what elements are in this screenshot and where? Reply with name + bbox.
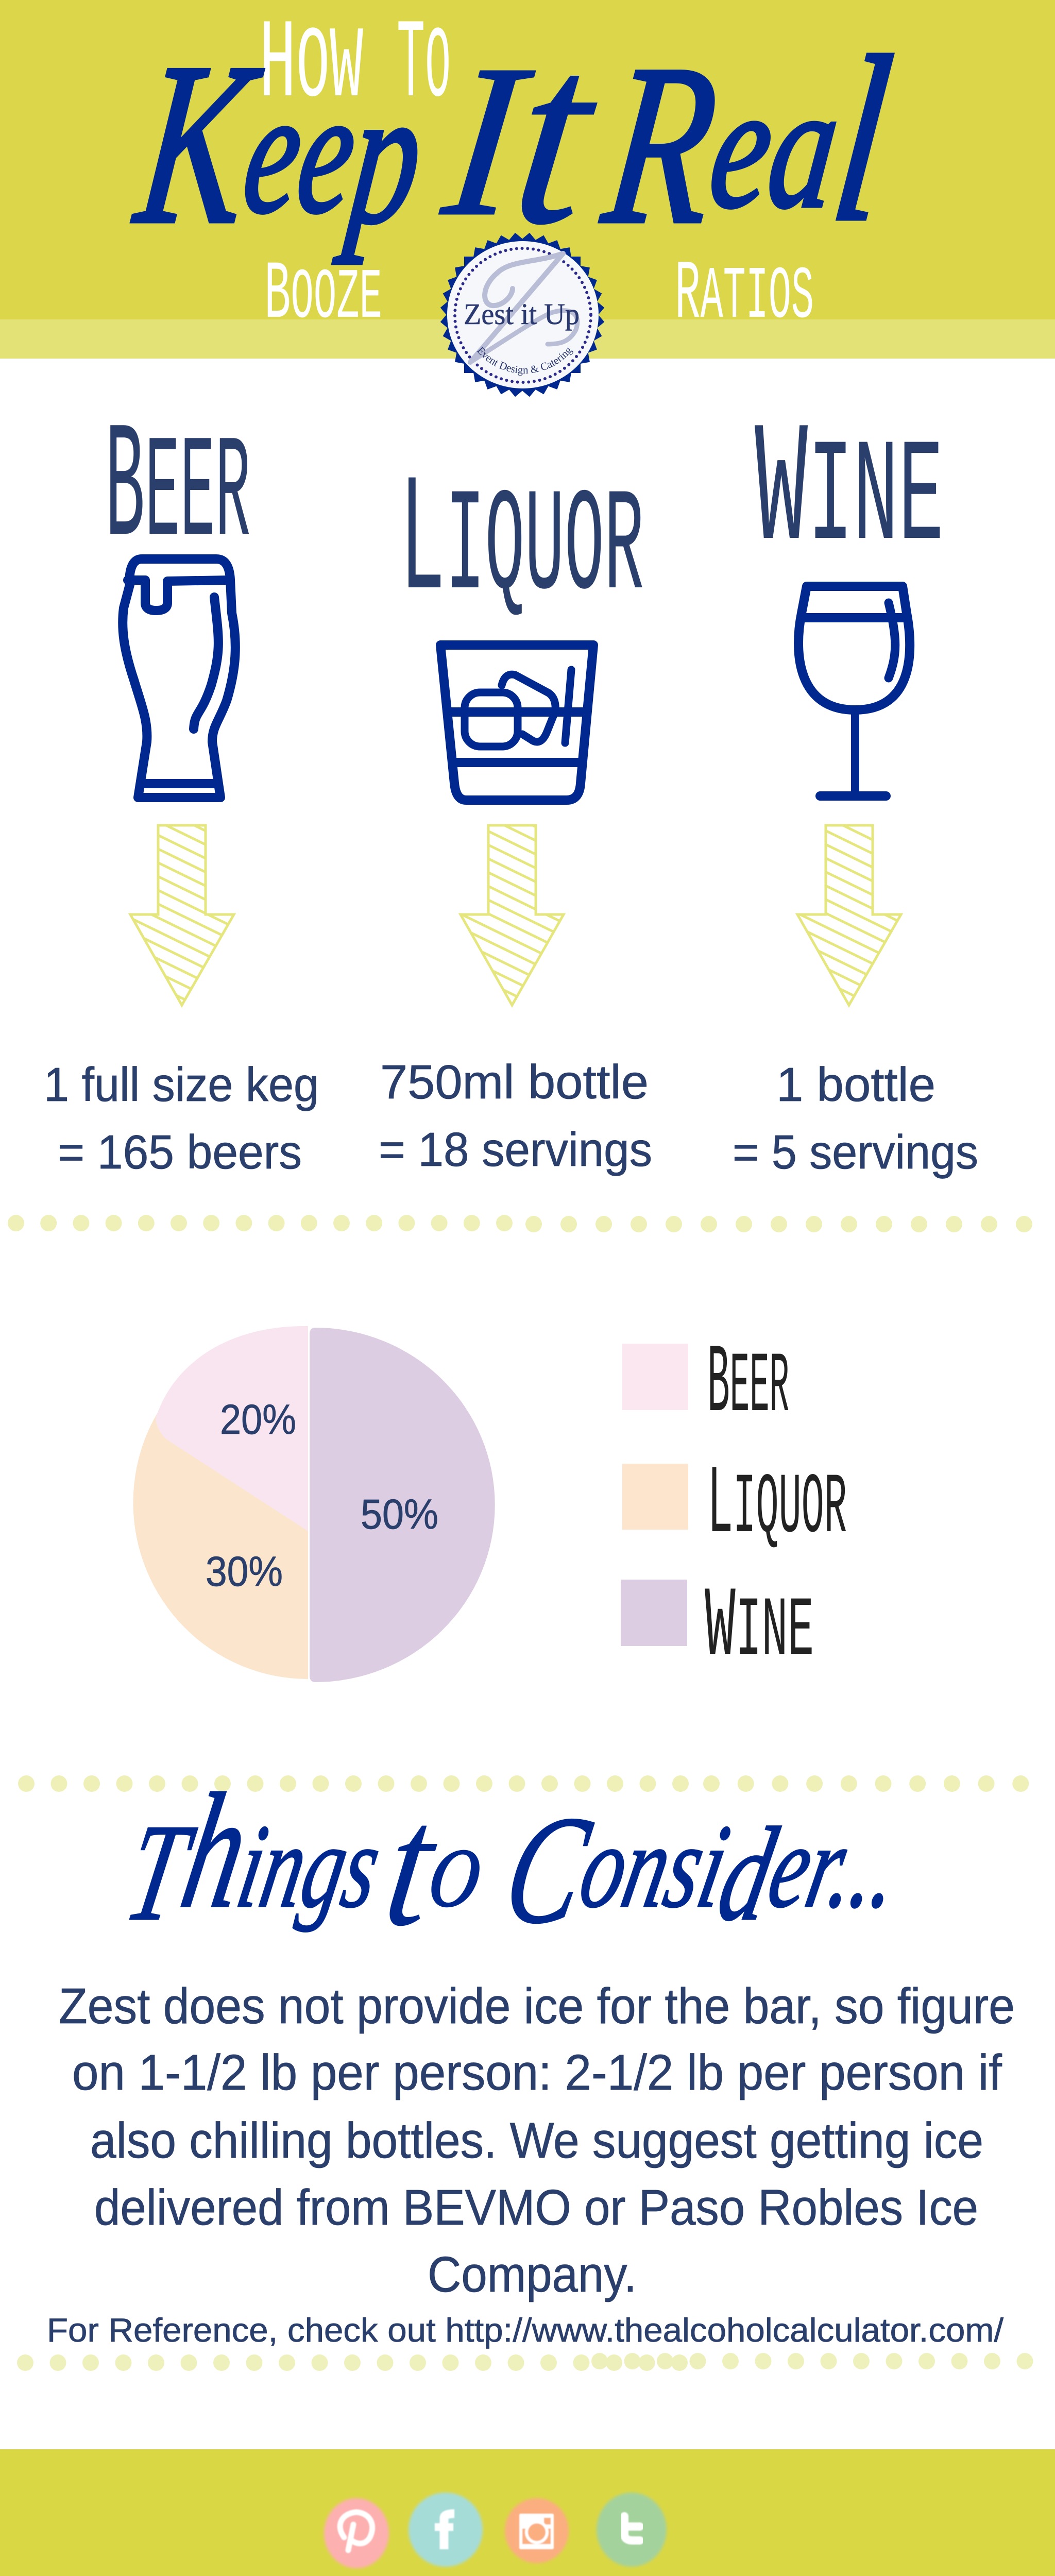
- subtitle: Booze Ratios: [264, 247, 814, 342]
- subtitle: Booze Ratios: BOOZE: [264, 249, 382, 342]
- title: How To: TO: [397, 3, 451, 129]
- heading: Things to Consider...: o: [422, 1800, 492, 1933]
- heading: Things to Consider...: onsi: [570, 1800, 739, 1932]
- icon: beer glass: [123, 559, 235, 798]
- text block: ice advice: also chilling bottles. We suggest getting ice: [90, 2112, 983, 2168]
- title: Keep It Real: K: [124, 15, 272, 272]
- text block: ice advice: [59, 1978, 1015, 2302]
- text block: ice advice: delivered from BEVMO or Paso Robles Ice: [94, 2179, 978, 2235]
- icon: twitter t: [597, 2493, 667, 2567]
- header band: [0, 0, 1055, 359]
- heading: Things to Consider...: t: [376, 1768, 450, 1962]
- legend: BEER: [707, 1329, 789, 1439]
- heading: Things to Consider...: ings: [228, 1800, 453, 1933]
- title: How To: HOW: [259, 3, 363, 129]
- text: liquor serving ratio: 750ml bottle: [380, 1055, 649, 1109]
- slice: liquor 30%: [133, 1326, 308, 1679]
- text: liquor serving ratio: [379, 1055, 652, 1176]
- text: wine serving ratio: 1 bottle: [776, 1058, 935, 1111]
- legend swatch: wine: [621, 1580, 687, 1646]
- label: 50%: 50%: [361, 1491, 438, 1538]
- title: Keep It Real: R: [591, 17, 729, 272]
- arrow: wine: [797, 825, 901, 1005]
- title: Keep It Real: p: [332, 47, 434, 264]
- slice: wine 50%: [310, 1328, 495, 1682]
- heading: Things to Consider...: er...: [759, 1800, 911, 1932]
- heading: Liquor: LIQUOR: [400, 449, 644, 638]
- slice: beer 20%: [156, 1326, 308, 1531]
- text: BEER: [105, 397, 250, 584]
- logo badge: Zest it Up: Zest it Up: [464, 297, 580, 331]
- title: Keep It Real: I: [434, 20, 536, 261]
- subtitle: Booze Ratios: RATIOS: [675, 247, 814, 342]
- text: reference link: For Reference, check out http://www.thealcoholcalculator.com/: [47, 2311, 1004, 2349]
- text block: ice advice: Zest does not provide ice for the bar, so figure: [59, 1978, 1015, 2034]
- icon: facebook: [409, 2493, 483, 2567]
- legend swatch: beer: [622, 1344, 688, 1410]
- title: Keep It Real: [124, 0, 903, 278]
- text: liquor serving ratio: = 18 servings: [379, 1123, 652, 1176]
- pie chart: [133, 1326, 495, 1682]
- legend: [621, 1329, 847, 1684]
- heading: Things to Consider...: C: [492, 1784, 604, 1955]
- arrow: beer: [130, 825, 234, 1005]
- icon: liquor glass with ice: [440, 645, 593, 800]
- icon: wine glass: [798, 586, 910, 796]
- text: beer serving ratio: = 165 beers: [58, 1125, 302, 1179]
- logo badge: Zest it Up: [440, 233, 605, 397]
- title: Keep It Real: ea: [701, 48, 849, 245]
- text: LIQUOR: [707, 1450, 847, 1561]
- legend label: wine: WINE: [705, 1571, 814, 1684]
- text: beer serving ratio: [44, 1058, 319, 1179]
- title: Keep It Real: ee: [235, 53, 366, 250]
- heading: Things to Consider...: h: [170, 1759, 262, 1942]
- text block: ice advice: Company.: [428, 2246, 637, 2302]
- legend swatch: liquor: [622, 1464, 688, 1530]
- heading: Things to Consider...: d: [708, 1800, 788, 1948]
- title: Keep It Real: t: [502, 0, 614, 278]
- icon: pinterest: [324, 2498, 389, 2568]
- icon: instagram: [505, 2498, 569, 2563]
- heading: Things to Consider...: T: [116, 1795, 205, 1949]
- text block: ice advice: on 1-1/2 lb per person: 2-1/2 lb per person if: [72, 2044, 1002, 2100]
- heading: Things to Consider...: [116, 1759, 915, 1962]
- label: 20%: 20%: [220, 1396, 296, 1443]
- label: 30%: 30%: [206, 1548, 283, 1595]
- text: wine serving ratio: = 5 servings: [733, 1125, 978, 1179]
- logo badge: Zest it Up: Event Design & Catering: [477, 346, 573, 376]
- text: wine serving ratio: [733, 1058, 978, 1179]
- text: beer serving ratio: 1 full size keg: [44, 1058, 319, 1111]
- arrow: liquor: [461, 825, 564, 1005]
- title: Keep It Real: l: [822, 8, 903, 270]
- footer band: [0, 2449, 1055, 2576]
